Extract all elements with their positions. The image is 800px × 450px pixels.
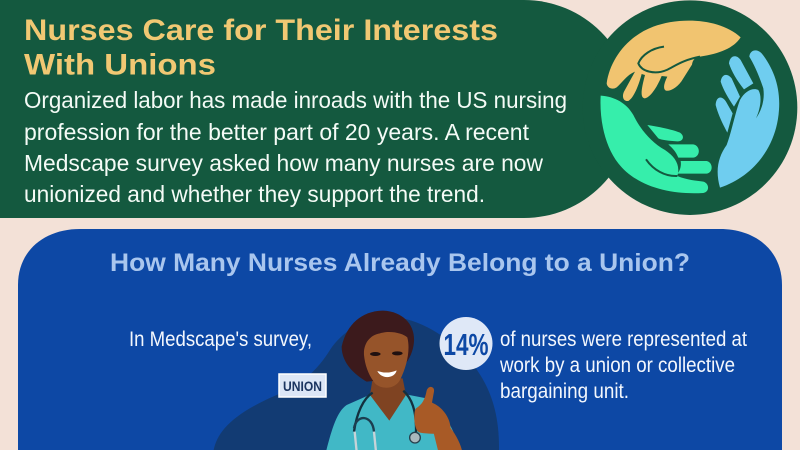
thumbs up hand bbox=[414, 387, 451, 434]
union badge: UNION bbox=[283, 378, 322, 394]
intro text: Organized labor has made inroads with the US nursing bbox=[24, 87, 567, 113]
forearm bbox=[433, 425, 462, 450]
14% stat badge: 14% bbox=[444, 327, 488, 362]
illustration: nurse with thumbs up bbox=[213, 311, 499, 450]
scrubs bbox=[326, 394, 453, 450]
neck bbox=[370, 378, 406, 421]
right statement: bargaining unit. bbox=[500, 380, 629, 403]
gold hand bbox=[607, 21, 741, 101]
icon: three caring hands bbox=[583, 0, 797, 215]
left statement: In Medscape's survey, bbox=[129, 328, 312, 351]
heading bbox=[24, 14, 498, 82]
dark backdrop shape bbox=[213, 317, 499, 450]
panel: green header bbox=[0, 0, 633, 218]
right statement bbox=[499, 328, 747, 403]
heading: Nurses Care for Their Interests bbox=[24, 14, 498, 47]
face bbox=[364, 332, 409, 388]
right statement: of nurses were represented at bbox=[500, 328, 747, 351]
14% stat badge bbox=[440, 317, 492, 370]
stethoscope bbox=[354, 391, 416, 450]
right statement: work by a union or collective bbox=[499, 354, 735, 377]
section heading: How Many Nurses Already Belong to a Union? bbox=[110, 249, 690, 277]
green hand bbox=[600, 96, 712, 193]
intro text: Medscape survey asked how many nurses are now bbox=[24, 150, 544, 176]
intro text: unionized and whether they support the trend. bbox=[24, 181, 485, 207]
eyes bbox=[370, 351, 403, 356]
chestpiece bbox=[410, 432, 420, 443]
intro text: profession for the better part of 20 years. A recent bbox=[24, 119, 529, 145]
smile bbox=[377, 370, 397, 377]
intro text bbox=[24, 87, 567, 207]
heading: With Unions bbox=[24, 48, 216, 82]
hair bbox=[342, 311, 414, 382]
union badge bbox=[279, 374, 326, 397]
blue hand bbox=[716, 50, 779, 188]
panel: blue section bbox=[18, 229, 782, 450]
